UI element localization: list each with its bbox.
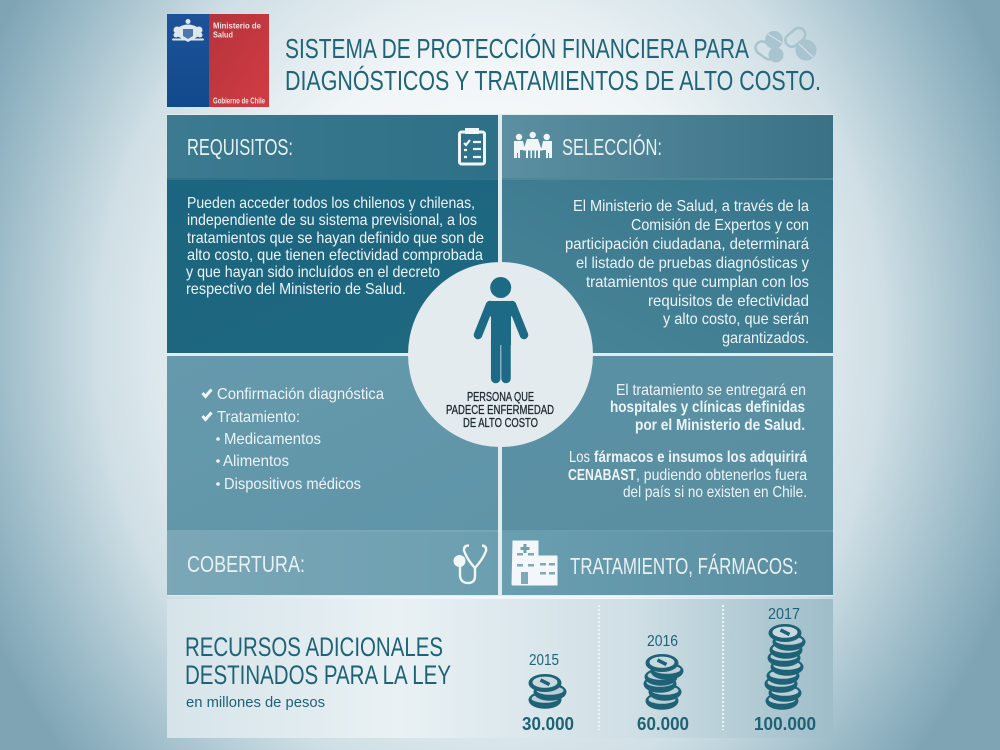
panel: recursos adicionales — [167, 599, 833, 738]
coins 2017 — [764, 624, 806, 710]
list: cobertura: Tratamiento: — [217, 409, 300, 426]
icon: hospital — [512, 541, 557, 585]
list: cobertura: Medicamentos — [224, 431, 321, 448]
chart: 2017: 100.000 — [754, 714, 816, 734]
text: tratamiento: por el Ministerio de Salud. — [635, 417, 805, 434]
icon: coat of arms — [172, 19, 204, 42]
text: tratamiento: fármacos e insumos los adquirirá — [594, 449, 807, 466]
list: cobertura: Dispositivos médicos — [224, 476, 361, 493]
text: seleccion: tratamientos que cumplan con los — [586, 274, 809, 291]
list: cobertura: Alimentos — [223, 453, 289, 470]
text: requisitos: independiente de su sistema previsional, a los — [187, 212, 477, 229]
body: cobertura — [167, 356, 498, 530]
heading: recursos — [185, 632, 451, 690]
text: seleccion: y alto costo, que serán — [663, 311, 809, 328]
text: seleccion: garantizados. — [722, 330, 809, 347]
icon: stethoscope — [454, 546, 486, 583]
heading: recursos: DESTINADOS PARA LA LEY — [185, 660, 451, 690]
text: tratamiento: El tratamiento se entregará en — [616, 382, 806, 399]
chart: 2017 — [754, 606, 816, 734]
panel: seleccion — [502, 115, 833, 353]
text: tratamiento: , pudiendo obtenerlos fuera — [636, 467, 807, 484]
text: seleccion: Comisión de Expertos y con — [631, 217, 809, 234]
chart: 2016: 60.000 — [637, 714, 689, 734]
center circle: persona — [408, 262, 593, 447]
text: tratamiento: del país si no existen en Chile. — [623, 484, 807, 501]
title — [285, 33, 821, 96]
chart: 2015: 30.000 — [522, 714, 574, 734]
list: cobertura: Confirmación diagnóstica — [217, 386, 384, 403]
heading: tratamiento: TRATAMIENTO, FÁRMACOS: — [570, 553, 798, 579]
icon: meeting — [514, 132, 552, 158]
body: tratamiento — [502, 356, 833, 530]
icon: pills — [753, 25, 816, 62]
heading: requisitos: REQUISITOS: — [187, 134, 293, 160]
label: persona: PERSONA QUE — [467, 390, 534, 404]
text: tratamiento: Los — [569, 449, 590, 466]
text: requisitos: alto costo, que tienen efectividad comprobada — [187, 247, 483, 264]
body: seleccion — [502, 180, 833, 353]
chart: 2017: 2017 — [768, 606, 800, 623]
title: SISTEMA DE PROTECCIÓN FINANCIERA PARA — [285, 33, 749, 64]
label: persona — [446, 390, 554, 430]
ministry name — [213, 22, 265, 106]
coins 2015 — [528, 674, 566, 709]
header: seleccion — [502, 115, 833, 178]
text: requisitos — [186, 195, 484, 298]
subtitle: recursos: en millones de pesos — [186, 694, 325, 711]
heading: seleccion: SELECCIÓN: — [562, 134, 662, 160]
chart: 2015 — [522, 652, 574, 734]
heading: recursos: RECURSOS ADICIONALES — [185, 632, 443, 662]
panel: requisitos — [167, 115, 498, 353]
ministry name: Gobierno de Chile — [213, 96, 265, 106]
header: tratamiento — [502, 532, 833, 595]
text: requisitos: y que hayan sido incluídos en el decreto — [186, 264, 440, 281]
text: requisitos: Pueden acceder todos los chilenos y chilenas, — [187, 195, 475, 212]
panel: cobertura — [167, 356, 498, 595]
chart: 2015: 2015 — [529, 652, 559, 669]
text: tratamiento: CENABAST — [568, 467, 636, 484]
list: cobertura — [202, 386, 384, 493]
label: persona: PADECE ENFERMEDAD — [446, 403, 554, 417]
text: seleccion: requisitos de efectividad — [648, 293, 809, 310]
icon: clipboard — [460, 128, 484, 164]
label: persona: DE ALTO COSTO — [463, 416, 538, 430]
ministry name: Salud — [213, 30, 233, 40]
logo: Ministerio de Salud — [167, 14, 269, 107]
coins 2016 — [644, 654, 684, 710]
heading: cobertura: COBERTURA: — [187, 551, 305, 577]
text: seleccion: el listado de pruebas diagnósticas y — [576, 255, 809, 272]
icon: person — [478, 277, 524, 378]
text: seleccion: El Ministerio de Salud, a través de la — [573, 198, 809, 215]
ministry name: Ministerio de — [213, 22, 262, 30]
panel gutters — [167, 114, 833, 596]
body: requisitos — [167, 180, 498, 353]
title: DIAGNÓSTICOS Y TRATAMIENTOS DE ALTO COSTO. — [285, 65, 821, 96]
text: requisitos: respectivo del Ministerio de Salud. — [186, 281, 406, 298]
text: seleccion — [565, 198, 809, 347]
text: seleccion: participación ciudadana, determinará — [565, 236, 809, 253]
chart: 2016: 2016 — [647, 633, 678, 650]
text: tratamiento: hospitales y clínicas definidas — [610, 399, 805, 416]
header: cobertura — [167, 532, 498, 595]
chart: 2016 — [637, 633, 689, 734]
text: tratamiento — [568, 382, 807, 501]
panel: tratamiento y farmacos — [502, 356, 833, 595]
header: requisitos — [167, 115, 498, 178]
text: requisitos: tratamientos que se hayan definido que son de — [187, 230, 484, 247]
